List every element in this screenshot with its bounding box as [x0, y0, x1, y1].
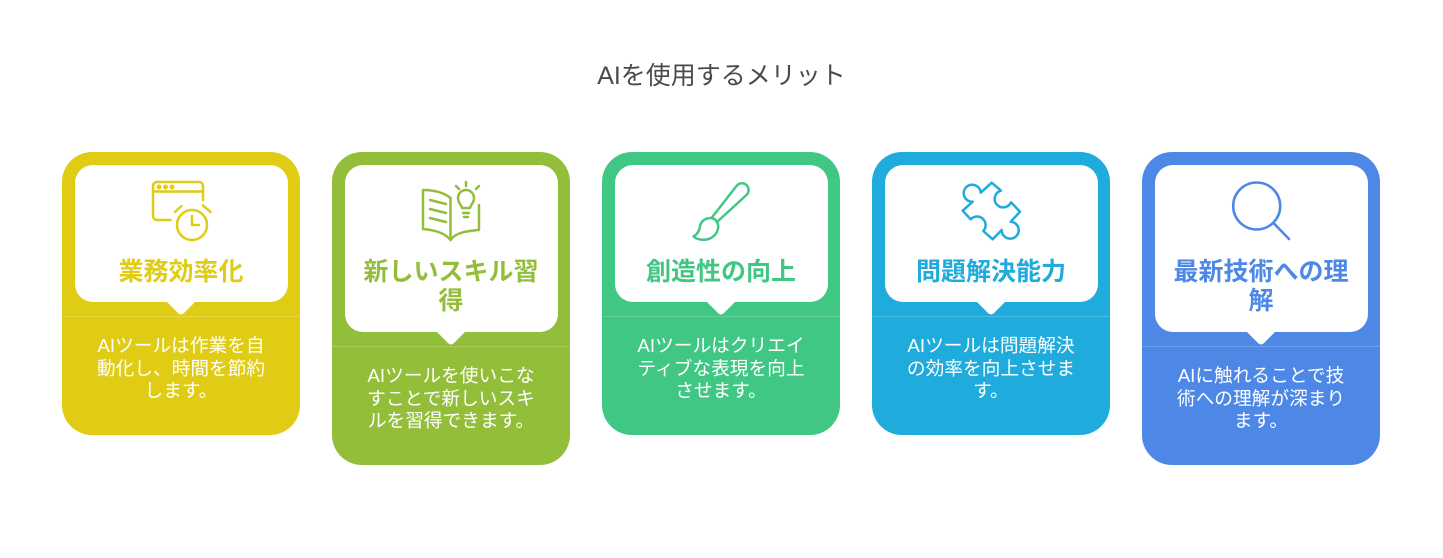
description: [637, 335, 805, 401]
description: [1177, 365, 1345, 431]
callout pointer: [707, 302, 735, 314]
heading: 新しいスキル習: [363, 258, 538, 286]
icon: open book with light bulb: [422, 180, 480, 242]
description: AIツールは作業を自: [97, 335, 265, 356]
panel: 業務効率化: [62, 152, 300, 435]
heading: 得: [438, 287, 464, 315]
heading: 創造性の向上: [646, 258, 796, 286]
description: ルを習得できます。: [368, 410, 534, 431]
callout pointer: [977, 302, 1005, 314]
description: 動化し、時間を節約: [97, 358, 265, 379]
description: AIツールを使いこな: [367, 365, 535, 386]
heading: 最新技術への理: [1173, 258, 1348, 286]
description: す。: [973, 380, 1009, 401]
heading: 問題解決能力: [916, 258, 1066, 286]
callout pointer: [437, 332, 465, 344]
description: すことで新しいスキ: [367, 388, 535, 409]
white header box: [885, 165, 1098, 302]
description: します。: [145, 380, 217, 401]
icon: magnifying glass: [1232, 181, 1290, 240]
heading: [363, 258, 538, 315]
panel: 最新技術への理解: [1142, 152, 1380, 465]
description: AIに触れることで技: [1178, 365, 1344, 386]
description: [97, 335, 265, 401]
description: AIツールはクリエイ: [637, 335, 805, 356]
white header box: [75, 165, 288, 302]
title: AIを使用するメリット: [597, 62, 846, 90]
white header box: [345, 165, 558, 332]
description: 術への理解が深まり: [1177, 388, 1345, 409]
white header box: [1155, 165, 1368, 332]
white header box: [615, 165, 828, 302]
description: ます。: [1234, 410, 1288, 431]
heading: 業務効率化: [118, 258, 244, 286]
description: [907, 335, 1075, 401]
icon: puzzle piece: [961, 181, 1022, 241]
panel: 創造性の向上: [602, 152, 840, 435]
heading: 解: [1248, 287, 1274, 315]
icon: paint brush: [692, 182, 750, 241]
description: の効率を向上させま: [907, 358, 1075, 379]
callout pointer: [1247, 332, 1275, 344]
description: AIツールは問題解決: [907, 335, 1075, 356]
description: させます。: [675, 380, 767, 401]
panel: 新しいスキル習得: [332, 152, 570, 465]
description: ティブな表現を向上: [637, 358, 805, 379]
panel: 問題解決能力: [872, 152, 1110, 435]
icon: browser window with alarm clock: [152, 180, 212, 242]
description: [367, 365, 535, 431]
callout pointer: [167, 302, 195, 314]
heading: [1173, 258, 1348, 315]
